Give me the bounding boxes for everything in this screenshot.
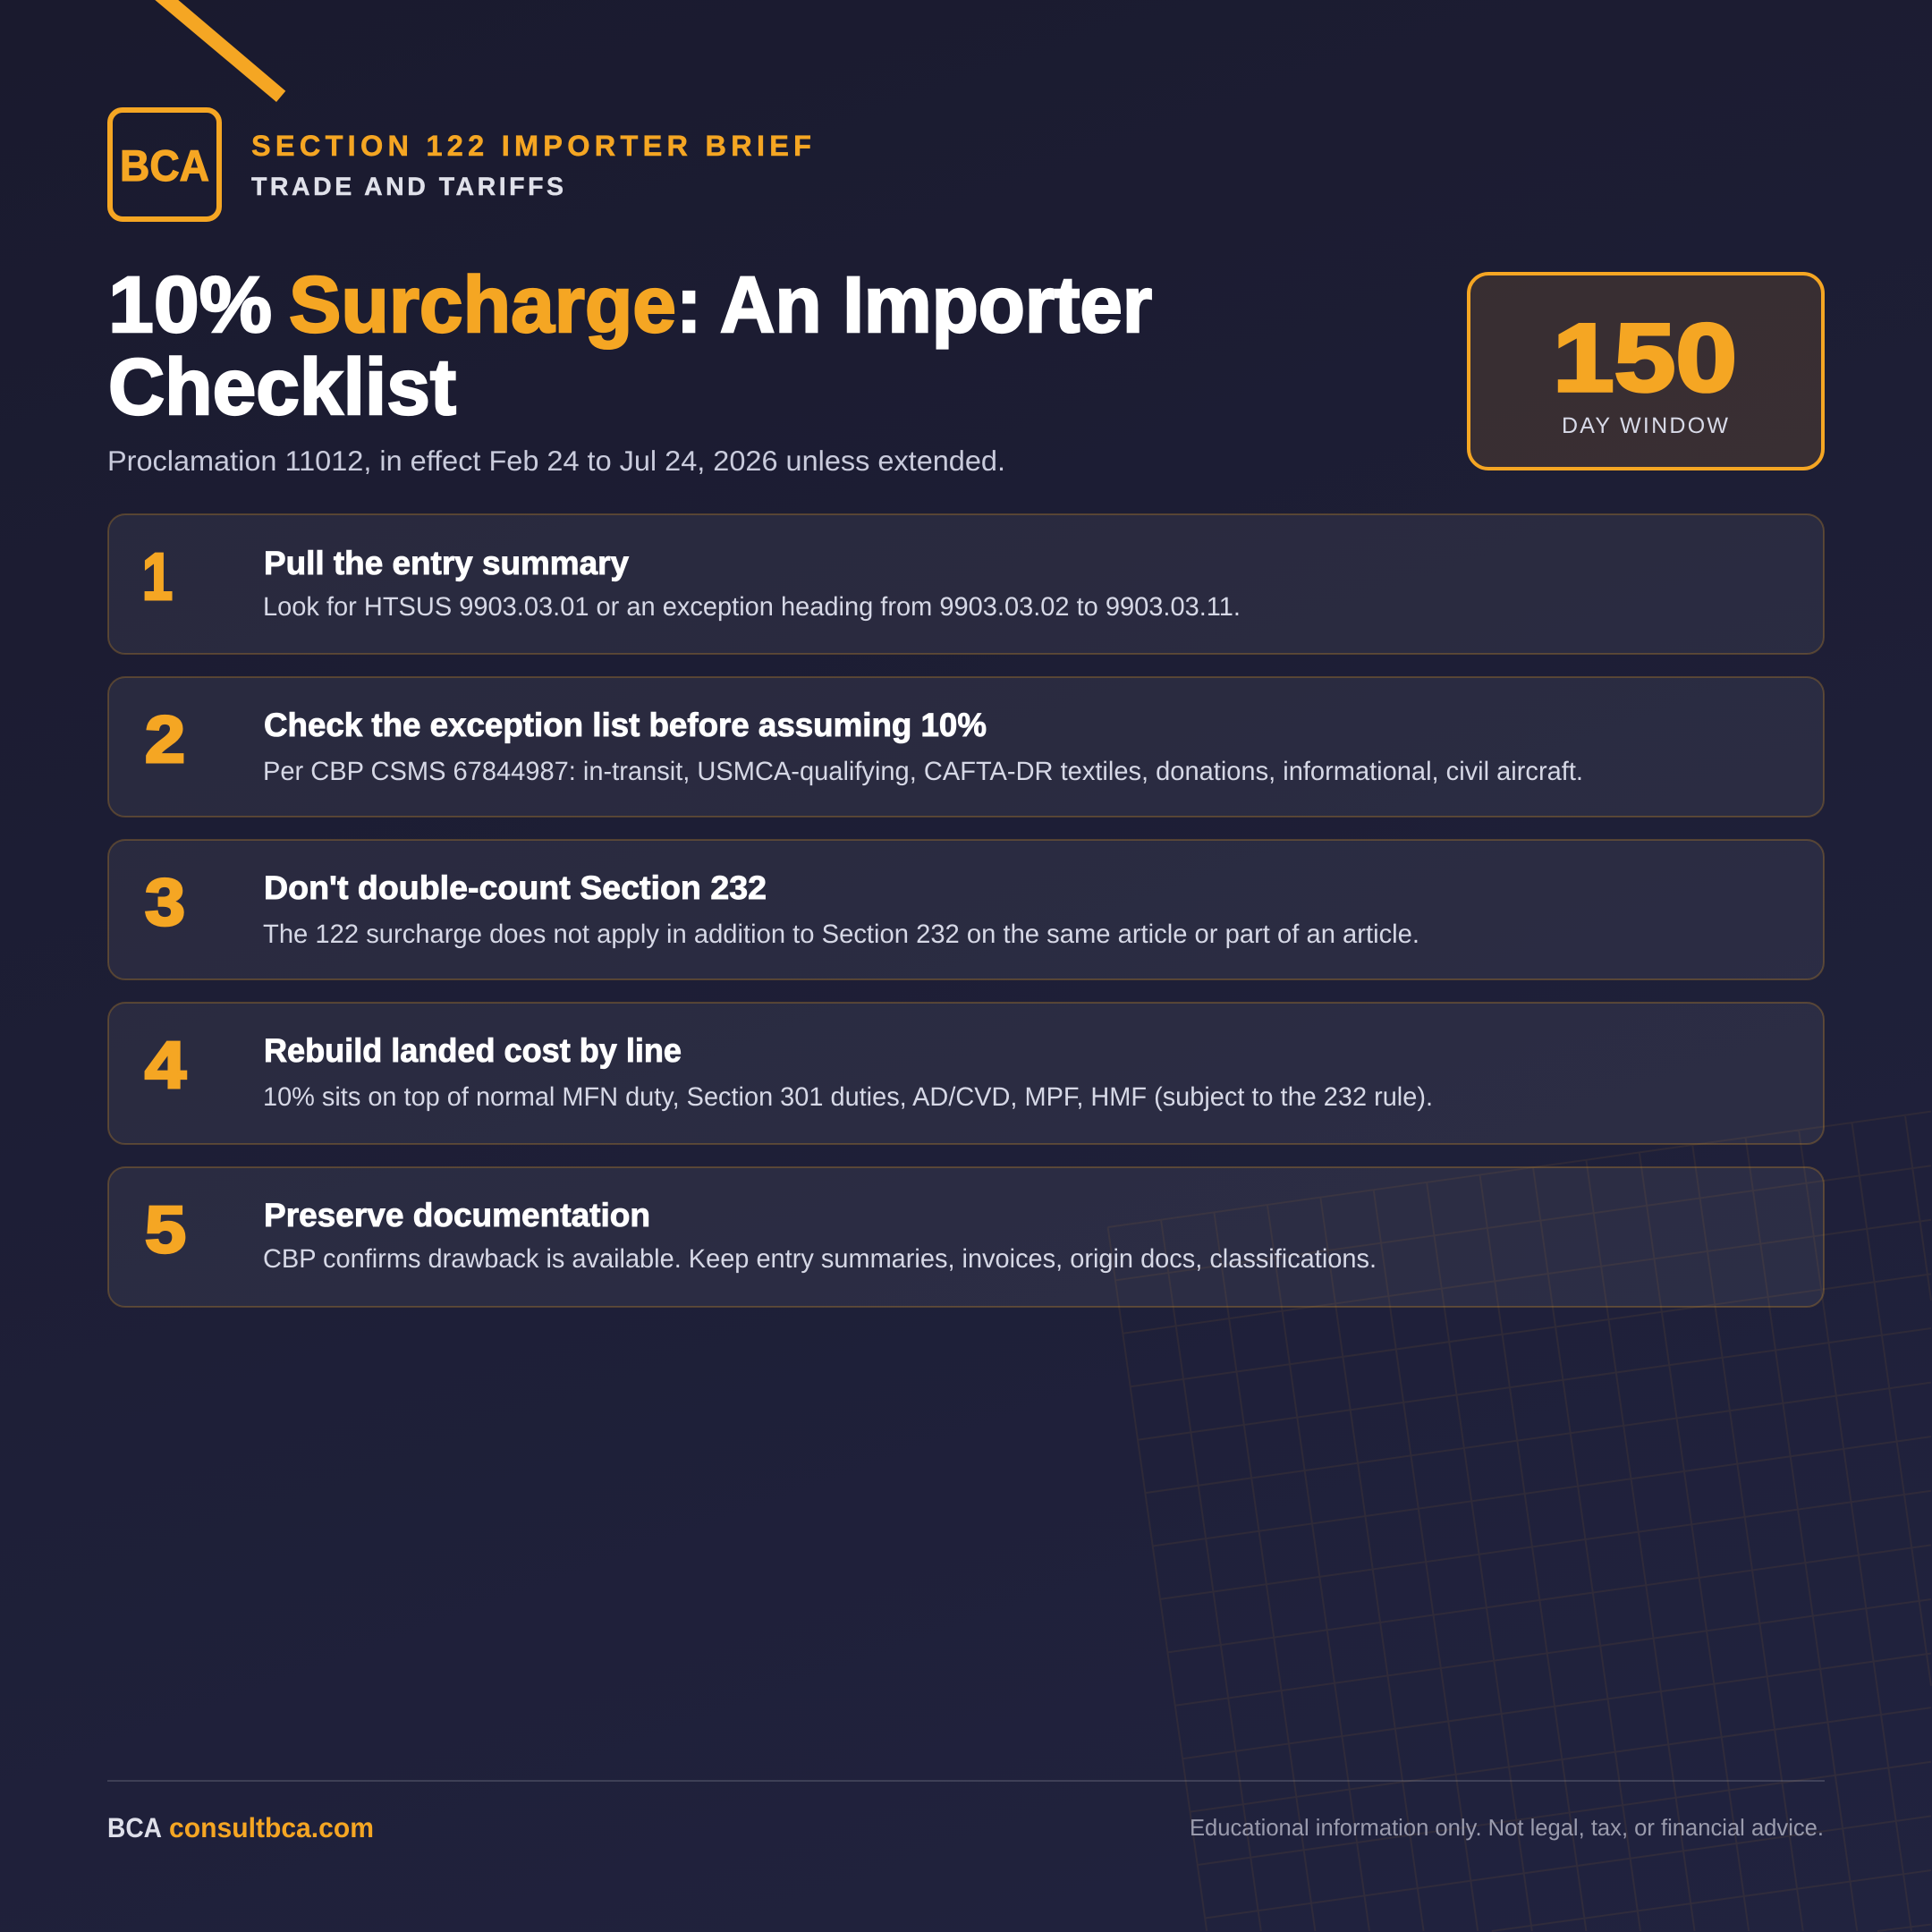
panel: step 2: [108, 677, 1824, 817]
decorative grid: [1108, 1112, 1931, 1931]
step 3 heading: Don't double-count Section 232: [264, 869, 767, 906]
title: : An Importer: [676, 259, 1152, 349]
eyebrow label: SECTION 122 IMPORTER BRIEF: [251, 130, 811, 162]
panel: step 1: [108, 514, 1824, 654]
step number 4: 4: [145, 1028, 186, 1102]
step 3 description: The 122 surcharge does not apply in addition to Section 232 on the same article or part of an article.: [263, 919, 1419, 949]
title: [108, 259, 1152, 431]
step number 5: 5: [145, 1192, 186, 1267]
logo badge: BCA: [120, 142, 209, 191]
stat number: 150: [1553, 303, 1737, 411]
footer brand: BCA: [107, 1812, 162, 1843]
step 1 heading: Pull the entry summary: [264, 545, 629, 581]
logo badge: [110, 110, 219, 219]
step number 2: 2: [145, 702, 185, 776]
step 2 heading: Check the exception list before assuming 10%: [264, 707, 987, 743]
step 4 heading: Rebuild landed cost by line: [264, 1032, 682, 1069]
title: Checklist: [108, 342, 456, 431]
panel: step 3: [108, 840, 1824, 979]
step 2 description: Per CBP CSMS 67844987: in-transit, USMCA-qualifying, CAFTA-DR textiles, donations, informational, civil aircraft.: [263, 757, 1583, 786]
panel: step 4: [108, 1003, 1824, 1144]
disclaimer: Educational information only. Not legal, tax, or financial advice.: [1190, 1814, 1824, 1841]
step 5 heading: Preserve documentation: [264, 1197, 650, 1233]
header: logo and brand: [110, 110, 811, 219]
step 4 description: 10% sits on top of normal MFN duty, Section 301 duties, AD/CVD, MPF, HMF (subject to the 232 rule).: [263, 1082, 1433, 1112]
title: Surcharge: [289, 259, 676, 349]
step 5 description: CBP confirms drawback is available. Keep entry summaries, invoices, origin docs, classifications.: [263, 1244, 1377, 1274]
panel: step 5: [108, 1167, 1824, 1307]
subtitle: Proclamation 11012, in effect Feb 24 to Jul 24, 2026 unless extended.: [107, 445, 1005, 477]
footer: [107, 1780, 1825, 1843]
stat label: DAY WINDOW: [1562, 413, 1728, 438]
stat callout: 150 day window: [1469, 274, 1823, 469]
step 1 description: Look for HTSUS 9903.03.01 or an exception heading from 9903.03.02 to 9903.03.11.: [263, 592, 1241, 622]
step number 1: 1: [142, 539, 173, 614]
category label: TRADE AND TARIFFS: [251, 173, 564, 201]
footer website: consultbca.com: [169, 1812, 374, 1843]
title: 10%: [108, 259, 272, 349]
accent diagonal line: [155, 0, 285, 102]
step number 3: 3: [145, 865, 185, 939]
